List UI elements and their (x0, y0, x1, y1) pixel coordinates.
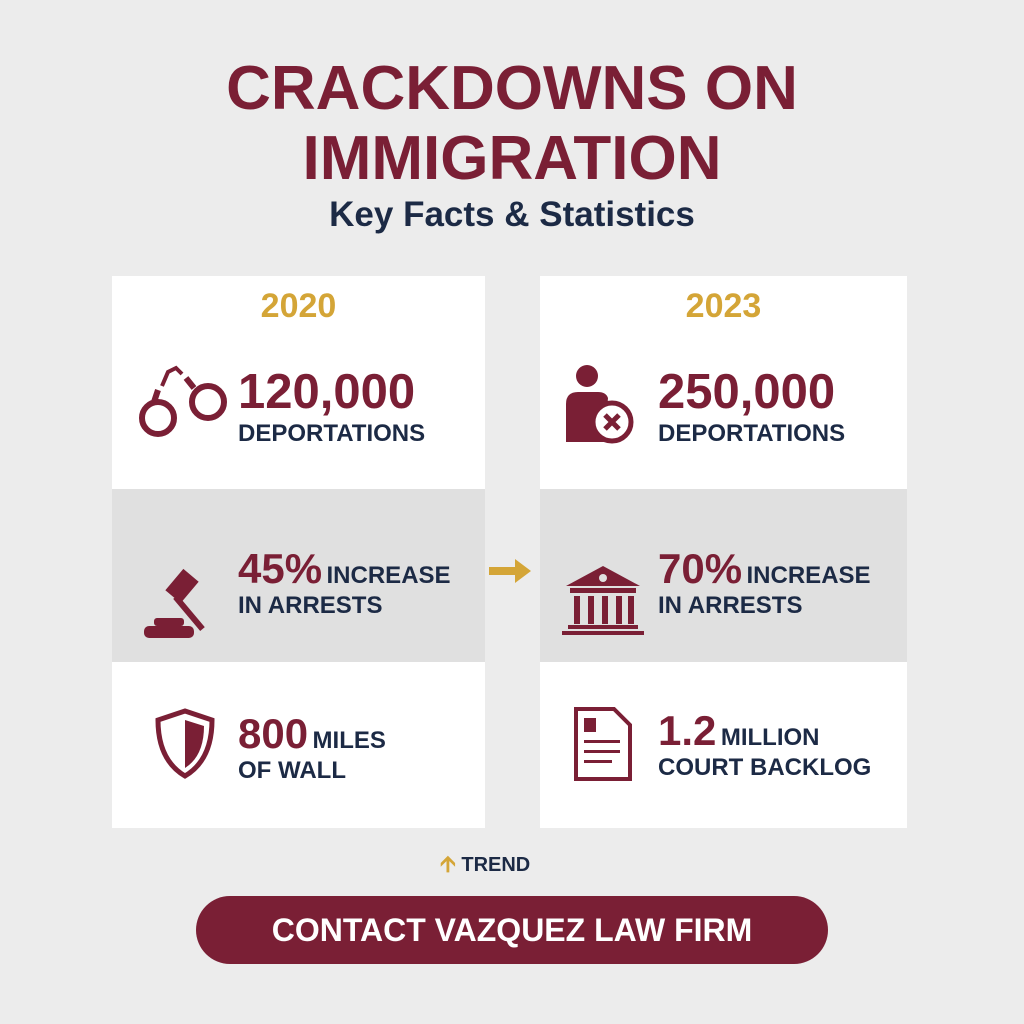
stat: 120,000 deportations (238, 365, 425, 447)
title: IMMIGRATION (302, 124, 722, 193)
subtitle: Key Facts & Statistics (329, 195, 695, 234)
stat: 70% increase (658, 545, 871, 619)
stat: 45% increase: 45% INCREASE (238, 545, 451, 592)
arrow: gold right (489, 559, 531, 583)
stat: 45% increase (238, 545, 451, 619)
stat: 70% increase: IN ARRESTS (658, 592, 802, 619)
row backgrounds (540, 276, 907, 489)
stat: 70% increase: 70% INCREASE (658, 545, 871, 592)
year heading 2020: 2020 (261, 287, 336, 325)
icon: courthouse (562, 566, 644, 635)
icon: handcuffs (139, 366, 227, 437)
icon: shield (156, 708, 214, 779)
button: contact: CONTACT VAZQUEZ LAW FIRM (272, 912, 752, 948)
stat: 800 miles: OF WALL (238, 757, 346, 784)
panel: 2020 (112, 276, 485, 828)
stat: 120,000 deportations: 120,000 (238, 365, 415, 419)
title: CRACKDOWNS ON (226, 54, 798, 123)
stat: 250,000 deportations (658, 365, 845, 447)
stat: 1.2 million (658, 707, 871, 781)
icon: person with x (566, 365, 634, 444)
stat: 800 miles: 800 MILES (238, 710, 386, 757)
stat: 45% increase: IN ARRESTS (238, 592, 382, 619)
button: contact (196, 896, 828, 964)
stat: 800 miles (238, 710, 386, 784)
stat: 250,000 deportations: DEPORTATIONS (658, 420, 845, 447)
stat: 120,000 deportations: DEPORTATIONS (238, 420, 425, 447)
row backgrounds (112, 276, 485, 489)
icon: document (574, 707, 632, 781)
trend legend: 🡩 TREND (440, 851, 530, 876)
title (226, 54, 798, 193)
stat: 1.2 million: COURT BACKLOG (658, 754, 871, 781)
year heading 2023: 2023 (686, 287, 761, 325)
stat: 1.2 million: 1.2 MILLION (658, 707, 820, 754)
stat: 250,000 deportations: 250,000 (658, 365, 835, 419)
panel: 2023 (540, 276, 907, 828)
icon: gavel (144, 568, 205, 638)
